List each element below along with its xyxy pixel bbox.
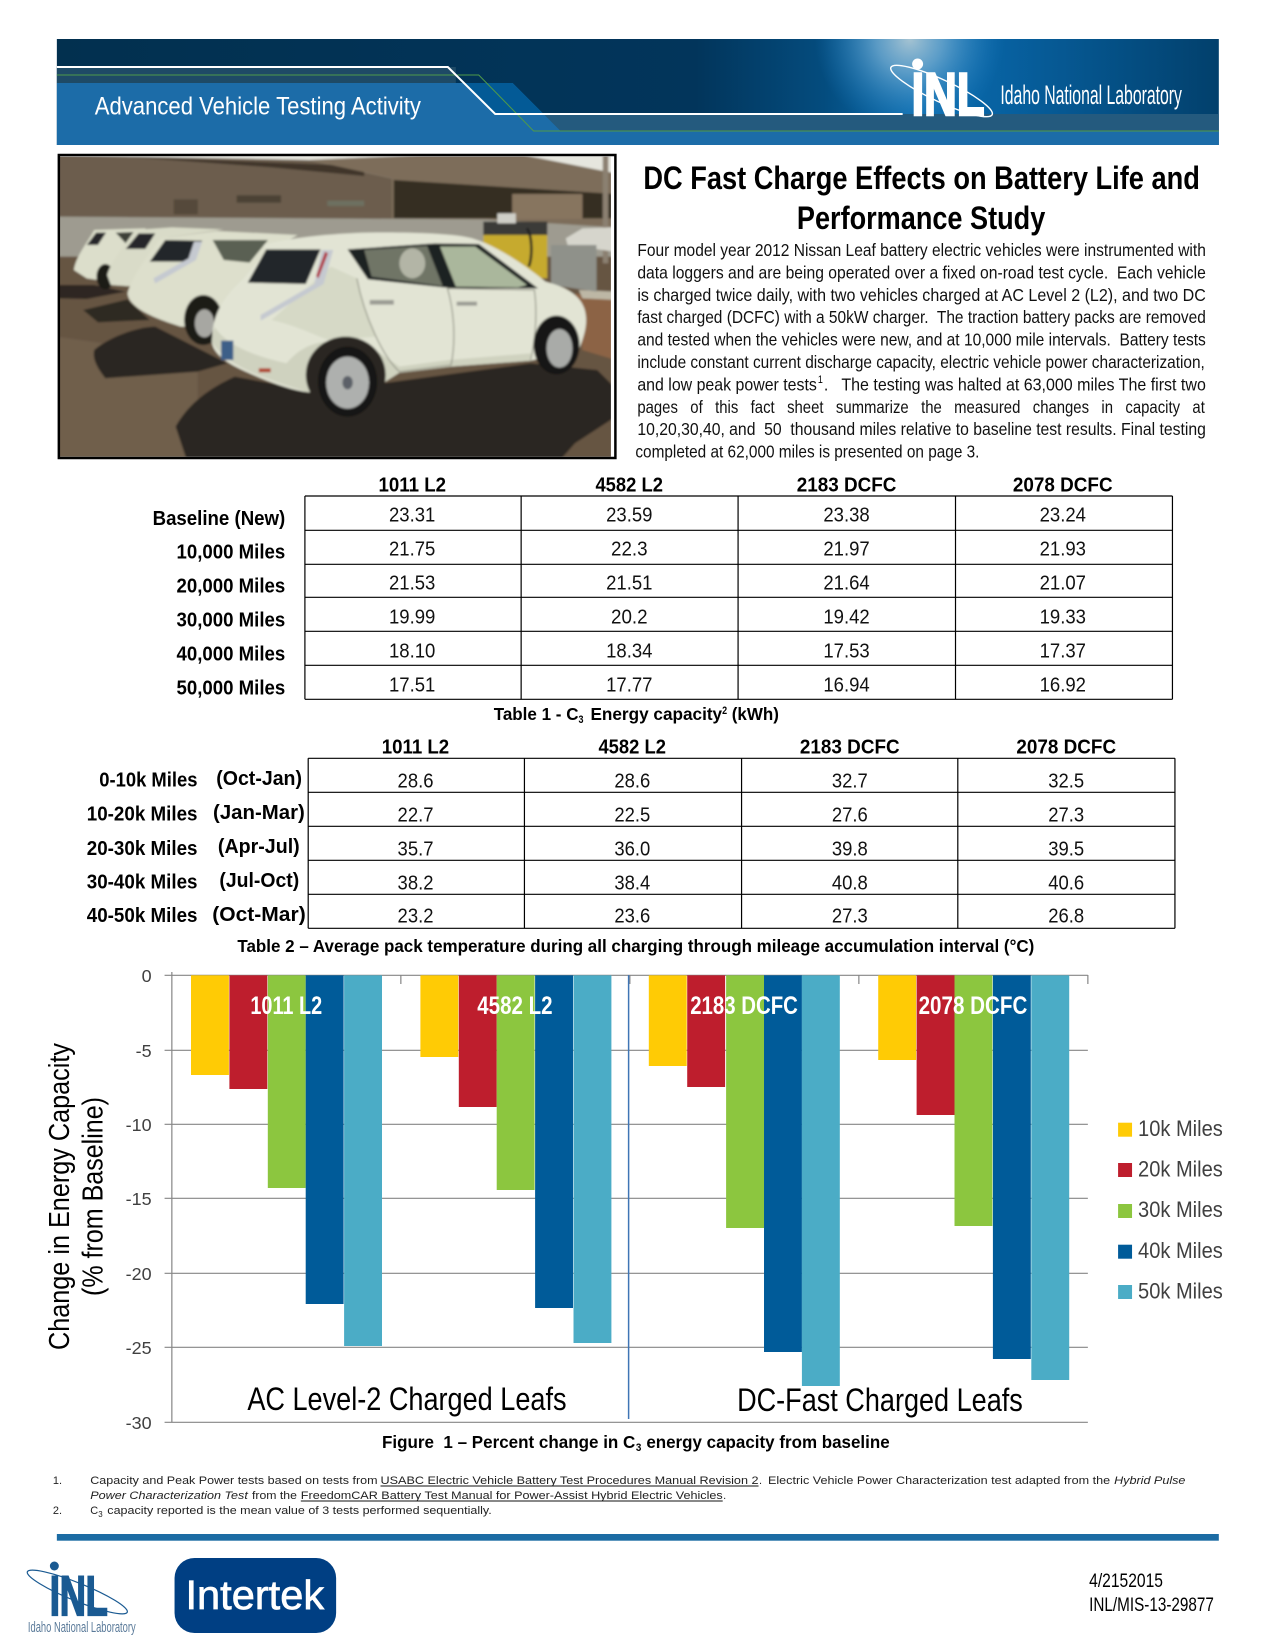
footnotes: Hybrid Pulse [1114, 1475, 1185, 1487]
INL logo footer [24, 1562, 136, 1636]
table 1 values: 23.31 [389, 505, 435, 527]
y axis tick labels: -20 [126, 1264, 152, 1284]
intro paragraph: is charged twice daily, with two vehicles charged at AC Level 2 (L2), and two DC [637, 285, 1206, 305]
table 1 column headers: 4582 L2 [595, 475, 663, 497]
table 2 caption: Table 2 – Average pack temperature during all charging through mileage accumulation interval (°C) [237, 936, 1034, 956]
intro paragraph: completed at 62,000 miles is presented on page 3. [635, 442, 979, 462]
table 1 caption [494, 704, 779, 726]
table 2 values: 36.0 [614, 838, 650, 860]
INL logo footer: Idaho National Laboratory [28, 1619, 136, 1636]
table 2 values: 38.2 [398, 872, 433, 894]
header banner [57, 39, 1219, 145]
bars: vehicle 2183 DCFC [649, 975, 840, 1386]
footnotes: Power Characterization Test [90, 1490, 249, 1502]
y axis tick labels: 0 [142, 966, 152, 986]
table 1 values: 19.99 [389, 606, 435, 628]
table 1 values: 22.3 [611, 539, 648, 561]
legend: 20k Miles [1138, 1157, 1223, 1182]
table 1 values: 18.34 [606, 641, 652, 663]
footnotes [53, 1475, 1185, 1519]
table 2 values: 38.4 [614, 872, 650, 894]
intro paragraph: fast charged (DCFC) with a 50kW charger. The traction battery packs are removed [637, 307, 1206, 327]
legend: 40k Miles [1138, 1238, 1223, 1263]
table 2 row labels: 10-20k Miles [87, 804, 197, 826]
bar label: 2078 DCFC [919, 992, 1027, 1020]
document title [643, 160, 1200, 236]
table 1 row labels: 50,000 Miles [177, 678, 285, 700]
table 1 caption: (kWh) [732, 704, 779, 724]
table 1 caption: 2 [722, 705, 727, 717]
footnotes: USABC Electric Vehicle Battery Test Procedures Manual Revision 2 [381, 1475, 759, 1487]
table 1 values: 23.38 [823, 505, 870, 527]
divider between AC and DC groups [628, 975, 629, 1419]
footnotes: . [723, 1490, 726, 1502]
table 2 row labels: 30-40k Miles [87, 872, 197, 894]
document date and number [1089, 1571, 1214, 1616]
footnotes: C [90, 1505, 98, 1517]
table 1 values: 21.53 [389, 572, 435, 594]
footnotes: . [759, 1475, 762, 1487]
y axis tick labels: -10 [126, 1115, 152, 1135]
table 1 values: 16.92 [1040, 675, 1086, 697]
table 1 column headers: 2078 DCFC [1013, 475, 1113, 497]
table 2 column headers: 2078 DCFC [1016, 736, 1116, 758]
document date and number: INL/MIS-13-29877 [1089, 1595, 1214, 1616]
table 1 values: 21.07 [1040, 572, 1086, 594]
table 2 row labels: (Oct-Jan) [216, 768, 302, 790]
y axis title: Change in Energy Capacity [44, 1043, 76, 1350]
table 2 values: 40.6 [1048, 872, 1084, 894]
figure caption: 3 [636, 1442, 641, 1454]
table 1 column headers: 1011 L2 [379, 475, 446, 497]
figure caption: energy capacity from baseline [646, 1432, 890, 1452]
table 1 values: 20.2 [611, 606, 648, 628]
table 1 values: 21.64 [823, 572, 870, 594]
footnotes: Electric Vehicle Power Characterization test adapted from the [768, 1475, 1110, 1487]
group label: AC Level-2: AC Level-2 Charged Leafs [247, 1381, 567, 1417]
table 1 values: 23.24 [1040, 505, 1086, 527]
figure caption: Figure 1 – Percent change in C [382, 1432, 635, 1452]
table 2 values: 32.5 [1048, 770, 1084, 792]
table 1 column headers: 2183 DCFC [797, 475, 896, 497]
table 2 values: 23.2 [398, 906, 433, 928]
footnotes: 1. [53, 1475, 62, 1487]
table 1 values: 21.75 [389, 539, 435, 561]
table 2 column headers [382, 736, 1116, 758]
table 1 values [389, 505, 1086, 697]
photo: Nissan Leaf vehicles at charging stations [50, 150, 628, 470]
bars: vehicle 2078 DCFC [878, 975, 1069, 1380]
table 1: C3 energy capacity [153, 475, 1172, 700]
table 2 row labels: (Oct-Mar) [212, 904, 306, 926]
table 2 values: 39.5 [1048, 838, 1084, 860]
intro paragraph: data loggers and are being operated over a fixed on-road test cycle. Each vehicle [637, 262, 1206, 282]
table 1 row labels: 10,000 Miles [177, 541, 285, 563]
table 1 values: 16.94 [823, 675, 870, 697]
bar chart: change in energy capacity [44, 966, 1223, 1433]
table 1 values: 21.97 [823, 539, 870, 561]
y axis tick labels: -5 [136, 1041, 152, 1061]
intro paragraph [635, 240, 1206, 462]
y axis tick labels: -25 [126, 1338, 152, 1358]
intro paragraph: Four model year 2012 Nissan Leaf battery electric vehicles were instrumented with [637, 240, 1206, 260]
footnotes: FreedomCAR Battery Test Manual for Power-Assist Hybrid Electric Vehicles [301, 1490, 723, 1502]
table 2 row labels: 0-10k Miles [99, 770, 197, 792]
table 1 values: 18.10 [389, 641, 435, 663]
table 1 values: 19.33 [1040, 606, 1086, 628]
intro paragraph: and tested when the vehicles were new, and at 10,000 mile intervals. Battery tests [637, 330, 1206, 350]
intro paragraph: and low peak power tests [637, 374, 817, 394]
legend: 10k Miles [1138, 1116, 1223, 1141]
bars: vehicle 4582 L2 [420, 975, 611, 1343]
document date and number: 4/2152015 [1089, 1571, 1163, 1592]
table 2 column headers: 1011 L2 [382, 736, 449, 758]
y axis title: (% from Baseline) [78, 1097, 110, 1296]
legend: 50k Miles [1138, 1279, 1223, 1304]
table 2 values: 28.6 [398, 770, 433, 792]
table 2 row labels: (Jan-Mar) [213, 802, 305, 824]
table 1 row labels: 20,000 Miles [177, 575, 285, 597]
table 2 values: 23.6 [614, 906, 650, 928]
bar label: 4582 L2 [477, 992, 553, 1020]
table 2 values: 27.3 [832, 906, 868, 928]
footnotes: from the [252, 1490, 297, 1502]
footnotes: Capacity and Peak Power tests based on tests from [90, 1475, 378, 1487]
footnotes: capacity reported is the mean value of 3 tests performed sequentially. [107, 1505, 492, 1517]
figure caption [382, 1432, 890, 1454]
table 2 values: 26.8 [1048, 906, 1084, 928]
table 1 caption: Table 1 - C [494, 704, 579, 724]
table 1 values: 17.53 [823, 641, 870, 663]
table 1 values: 19.42 [823, 606, 870, 628]
table 2 values: 22.5 [614, 804, 650, 826]
bar label: 1011 L2 [250, 992, 322, 1020]
table 2 values: 27.3 [1048, 804, 1084, 826]
document title: Performance Study [797, 200, 1045, 236]
table 1 row labels [153, 508, 285, 700]
intro paragraph: include constant current discharge capacity, electric vehicle power characterization, [637, 352, 1205, 372]
table 2 values [398, 770, 1084, 928]
table 1 caption: Energy capacity [590, 704, 722, 724]
legend: 30k Miles [1138, 1197, 1223, 1222]
table 1 caption: 3 [578, 714, 583, 726]
table 2 row labels: (Jul-Oct) [219, 870, 299, 892]
y axis title [44, 1043, 110, 1350]
table 2 values: 39.8 [832, 838, 868, 860]
table 1 column headers [379, 475, 1113, 497]
legend [1118, 1116, 1223, 1304]
intro paragraph: 1 [818, 374, 823, 386]
table 2: average pack temperature [87, 736, 1175, 928]
bar label: 2183 DCFC [690, 992, 798, 1020]
table 2 values: 40.8 [832, 872, 868, 894]
table 1 values: 21.51 [606, 572, 652, 594]
table 2 values: 32.7 [832, 770, 868, 792]
table 1 values: 17.77 [606, 675, 652, 697]
bars: vehicle 1011 L2 [191, 975, 382, 1346]
group label: DC-Fast: DC-Fast Charged Leafs [737, 1382, 1023, 1418]
table 2 values: 22.7 [398, 804, 433, 826]
table 1 row labels: Baseline (New) [153, 508, 285, 530]
intro paragraph: . The testing was halted at 63,000 miles The first two [824, 374, 1206, 394]
table 1 values: 21.93 [1040, 539, 1086, 561]
table 1 values: 23.59 [606, 505, 652, 527]
table 1 row labels: 30,000 Miles [177, 610, 285, 632]
y axis tick labels: -15 [126, 1189, 152, 1209]
table 2 row labels: (Apr-Jul) [218, 836, 300, 858]
Intertek logo: Intertek [186, 1572, 325, 1618]
banner title: Advanced Vehicle Testing Activity [95, 92, 421, 121]
table 1 values: 17.37 [1040, 641, 1086, 663]
footnotes: 3 [98, 1510, 103, 1519]
table 1 row labels: 40,000 Miles [177, 644, 285, 666]
footnotes: 2. [53, 1505, 62, 1517]
table 2 values: 28.6 [614, 770, 650, 792]
table 2 values: 35.7 [398, 838, 433, 860]
Intertek logo [175, 1558, 336, 1633]
y axis tick labels [126, 966, 152, 1433]
table 1 values: 17.51 [389, 675, 435, 697]
table 2 column headers: 4582 L2 [598, 736, 666, 758]
table 2 row labels: 20-30k Miles [87, 838, 197, 860]
INL logo in banner: INL [912, 61, 984, 128]
intro paragraph: 10,20,30,40, and 50 thousand miles relative to baseline test results. Final testing [637, 419, 1206, 439]
y axis tick labels: -30 [126, 1413, 152, 1433]
INL logo in banner [886, 57, 997, 128]
table 2 row labels [87, 768, 306, 927]
table 2 column headers: 2183 DCFC [800, 736, 900, 758]
INL logo footer: INL [50, 1564, 108, 1627]
table 2 values: 27.6 [832, 804, 868, 826]
footer rule [57, 1534, 1219, 1541]
table 2 row labels: 40-50k Miles [87, 905, 197, 927]
